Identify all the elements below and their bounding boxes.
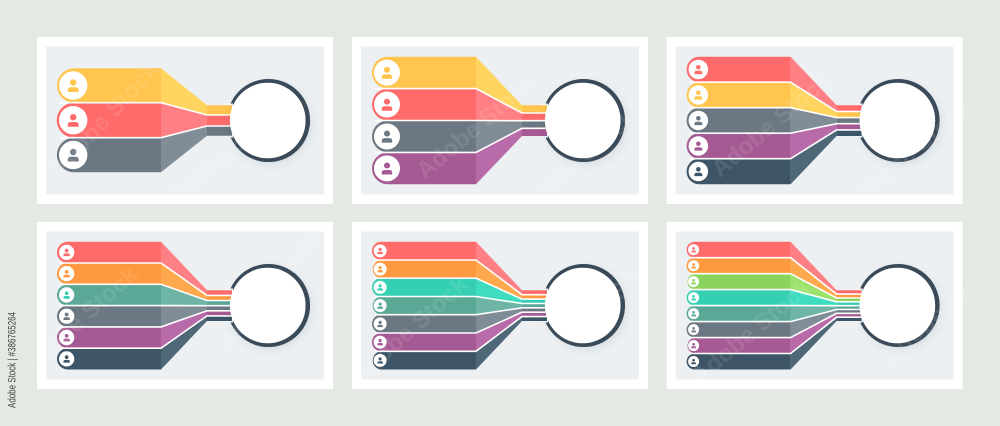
band: yellow (57, 68, 232, 115)
band: purple (57, 311, 232, 348)
band: navy (687, 130, 862, 184)
band: yellow (687, 82, 862, 118)
circle: empty hub (860, 83, 935, 158)
watermarks: Adobe Stock (346, 271, 474, 389)
band: slate (57, 306, 232, 327)
band: sage (373, 296, 547, 315)
circle: empty hub (230, 268, 306, 343)
band: green (687, 274, 862, 302)
band: sage (687, 306, 862, 322)
band: slate (687, 108, 862, 133)
band: red (687, 242, 862, 294)
watermarks: Adobe Stock (214, 224, 329, 354)
band: orange (57, 263, 232, 300)
panel: seven-step funnel (352, 222, 648, 389)
watermarks: Adobe Stock (847, 94, 977, 210)
band: navy (687, 317, 862, 370)
band: purple (687, 313, 862, 354)
watermarks: Adobe Stock (45, 56, 165, 182)
panel: five-step funnel (667, 37, 963, 204)
band: orange (373, 260, 547, 299)
band: purple (372, 128, 547, 184)
band: purple (687, 124, 862, 159)
band: slate (687, 310, 862, 338)
watermarks (16, 56, 1000, 390)
watermarks: Adobe Stock (162, 95, 292, 211)
panel: six-step funnel (37, 222, 333, 389)
watermarks: Adobe Stock (16, 261, 144, 379)
credit text: stock id: Adobe Stock | #386765264 (6, 312, 18, 408)
band: slate (372, 308, 547, 333)
watermarks: Adobe Stock (687, 274, 817, 390)
band: sage (57, 284, 232, 306)
band: orange (687, 258, 862, 298)
panel: four-step funnel (352, 37, 648, 204)
band: turquoise (372, 278, 547, 304)
band: red (57, 242, 232, 295)
band: red (687, 57, 862, 111)
panel: three-step funnel (37, 37, 333, 204)
panel: eight-step funnel (667, 222, 963, 389)
watermarks: Adobe Stock (542, 244, 672, 360)
circle: empty hub (545, 83, 620, 158)
band: purple (372, 312, 547, 351)
circle: empty hub (230, 83, 306, 158)
band: yellow (372, 57, 547, 113)
watermarks: Adobe Stock (412, 69, 542, 185)
circle: empty hub (545, 268, 620, 343)
band: slate (57, 126, 232, 172)
watermarks: Adobe Stock (512, 104, 642, 220)
band: red (57, 103, 232, 138)
band: navy (373, 317, 547, 370)
circle: empty hub (860, 268, 935, 343)
band: turquoise (687, 290, 862, 306)
band: slate (372, 120, 547, 152)
band: navy (57, 316, 232, 370)
watermarks: Adobe Stock (707, 67, 837, 183)
band: red (372, 242, 547, 295)
band: red (372, 89, 547, 121)
